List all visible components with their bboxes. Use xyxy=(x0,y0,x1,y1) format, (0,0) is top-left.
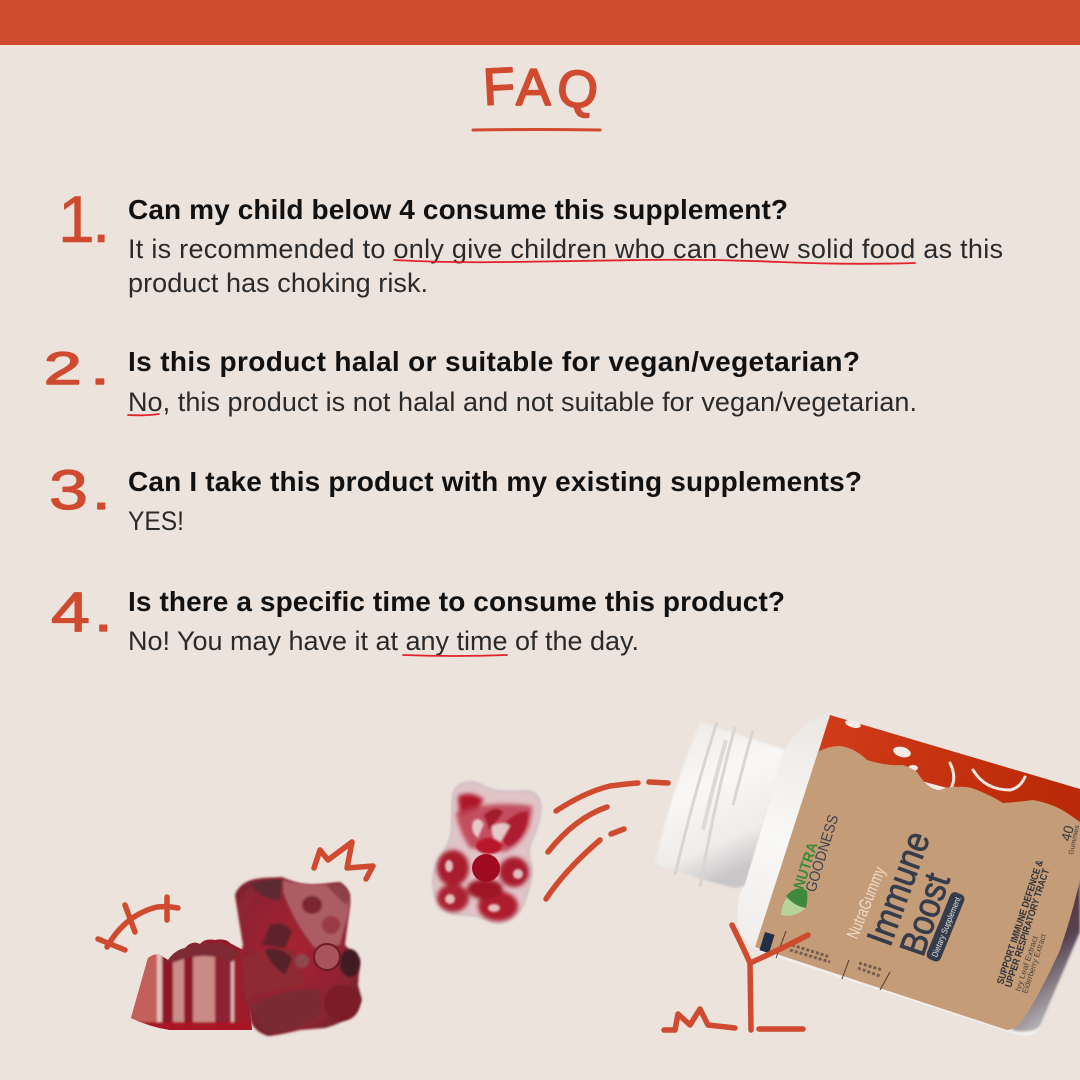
answer 1 xyxy=(128,234,1003,298)
red label band xyxy=(818,715,1080,824)
label decorations xyxy=(844,719,1025,790)
answer 2: No, this product is not halal and not suitable for vegan/vegetarian. xyxy=(128,387,917,417)
gummy: lying block and bear xyxy=(125,877,362,1036)
gummy bear lying xyxy=(235,877,362,1036)
gummy bear upright xyxy=(433,782,541,922)
top bar xyxy=(0,0,1080,45)
faq item 2 xyxy=(44,344,917,417)
question 2: Is this product halal or suitable for vegan/vegetarian? xyxy=(128,346,860,377)
scribble: Y shape and baseline xyxy=(732,925,808,1030)
faq item 3 xyxy=(49,460,862,536)
answer 1: product has choking risk. xyxy=(128,268,428,298)
benefit claims: SUPPORT IMMUNE DEFENCE & xyxy=(995,859,1046,986)
scribble: motion lines xyxy=(546,782,668,899)
count xyxy=(1057,823,1080,855)
gummy block xyxy=(131,939,252,1030)
product bottle xyxy=(655,713,1080,1036)
question 3: Can I take this product with my existing supplements? xyxy=(128,466,862,497)
answer 4: No! You may have it at any time of the day. xyxy=(128,626,639,656)
product name: Immune xyxy=(859,826,938,951)
title: FAQ: FAQ xyxy=(482,57,600,120)
answer 1: It is recommended to only give children who can chew solid food as this xyxy=(128,234,1003,264)
nutrition panel xyxy=(759,931,890,990)
brand logo xyxy=(781,813,842,916)
question 4: Is there a specific time to consume this product? xyxy=(128,586,785,617)
benefit claims: Elderberry Extract xyxy=(1020,932,1048,995)
product name: Boost xyxy=(892,867,958,961)
gummies visible through bottle xyxy=(1012,870,1080,1031)
bottle neck xyxy=(655,722,785,888)
brand name: NUTRA xyxy=(791,840,822,891)
faq item 1 xyxy=(58,182,1003,298)
kraft label xyxy=(755,746,1080,1030)
bottle body xyxy=(738,713,1080,1036)
scribble: zigzag above gummy xyxy=(314,842,373,879)
question 1: Can my child below 4 consume this supplement? xyxy=(128,194,788,225)
product line name: NutraGummy xyxy=(843,864,889,941)
benefit claims: Ivy Leaf Extract xyxy=(1013,934,1040,993)
brand logo: GOODNESS xyxy=(803,813,842,894)
faq item 4 xyxy=(51,582,785,656)
scribble: cross arc xyxy=(98,897,178,950)
answer 3: YES! xyxy=(128,506,184,536)
count: 40 xyxy=(1057,823,1077,843)
dietary supplement pill: Dietary Supplement xyxy=(929,895,963,959)
number 1: 1. xyxy=(58,182,110,256)
number 2: 2. xyxy=(44,344,109,394)
leaf icon xyxy=(781,888,807,916)
number 4: 4. xyxy=(51,582,113,643)
benefit claims: UPPER RESPIRATORY TRACT xyxy=(1003,868,1052,989)
number 3: 3. xyxy=(49,460,111,521)
